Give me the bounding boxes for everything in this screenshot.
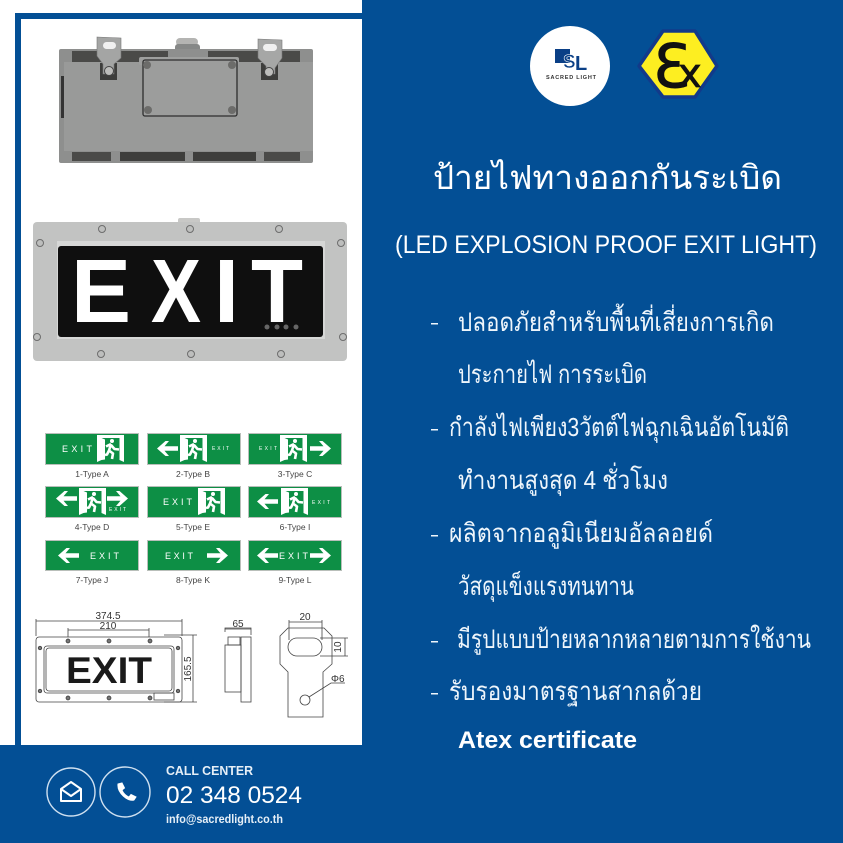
sign: type J: 7-Type J: [76, 575, 108, 585]
icon: phone: [100, 767, 150, 817]
bullet 2: ทำงานสูงสุด 4 ชั่วโมง: [458, 462, 668, 496]
sign: type E: [148, 486, 240, 532]
sign: type A: 1-Type A: [75, 469, 109, 479]
sign: type L: [248, 540, 342, 585]
icon: email: [47, 768, 95, 816]
bullet 3: [431, 518, 713, 602]
technical drawing: mounting bracket: 10: [333, 641, 344, 653]
EXIT lettering: I: [214, 242, 239, 342]
call center label: CALL CENTER: [166, 763, 254, 778]
product photo: front of fixture with EXIT sign: [33, 218, 347, 361]
sign: type L: 9-Type L: [278, 575, 312, 585]
phone number: 02 348 0524: [166, 782, 302, 809]
product photo: back of fixture: [59, 37, 313, 163]
sign: type D: EXIT: [109, 507, 126, 513]
technical drawing: side view: 65: [232, 619, 244, 630]
sign: type J: EXIT: [90, 551, 120, 561]
sign: type E: 5-Type E: [176, 522, 210, 532]
technical drawing: front view with dimensions: 210: [100, 621, 117, 632]
sign: type K: 8-Type K: [176, 575, 210, 585]
bullet 5: รับรองมาตรฐานสากลด้วย: [449, 676, 702, 707]
bullet 5: Atex certificate: [458, 727, 637, 754]
sign: type C: EXIT: [259, 446, 277, 452]
logo: Sacred Light: SACRED LIGHT: [546, 75, 597, 81]
technical drawing: front view with dimensions: 374.5: [95, 611, 121, 622]
logo: Sacred Light: L: [575, 53, 587, 75]
technical drawing: front view with dimensions: [36, 611, 197, 702]
technical drawing: front view with dimensions: 165.5: [183, 656, 194, 682]
sign: type K: EXIT: [165, 551, 194, 561]
sign: type C: [248, 434, 342, 479]
logo: Sacred Light: S: [563, 52, 576, 73]
footer: contact band: [47, 763, 302, 826]
bullet 1: [431, 303, 774, 389]
sign: type B: [148, 434, 240, 479]
sign: type I: 6-Type I: [280, 522, 310, 532]
sign: type A: [46, 434, 138, 479]
technical drawing: side view: [225, 619, 251, 702]
panel: product images: [0, 0, 362, 745]
sign: type L: EXIT: [279, 551, 308, 561]
logo: ATEX Ex hexagon: [639, 31, 717, 102]
logo: ATEX Ex hexagon: Ɛ: [653, 32, 690, 102]
subtitle: (LED EXPLOSION PROOF EXIT LIGHT): [395, 231, 817, 259]
bullet 3: วัสดุแข็งแรงทนทาน: [458, 570, 634, 602]
EXIT lettering: T: [251, 242, 303, 342]
sign: type I: EXIT: [312, 500, 330, 506]
sign: type J: [46, 540, 138, 585]
bullet 1: ประกายไฟ การระเบิด: [458, 359, 647, 389]
EXIT lettering: X: [151, 242, 201, 342]
sign: type E: EXIT: [163, 497, 192, 507]
sign: type I: [248, 486, 342, 532]
bullet 1: ปลอดภัยสำหรับพื้นที่เสี่ยงการเกิด: [458, 303, 774, 337]
technical drawing: mounting bracket: Φ6: [331, 674, 345, 685]
sign: type B: EXIT: [212, 446, 229, 452]
sign: type B: 2-Type B: [176, 469, 210, 479]
feature list: [431, 303, 811, 754]
technical drawing: mounting bracket: 20: [299, 612, 311, 623]
technical drawing: mounting bracket: [280, 612, 348, 717]
bullet 5: [431, 676, 702, 754]
bullet 2: [431, 412, 789, 496]
bullet 3: ผลิตจากอลูมิเนียมอัลลอยด์: [449, 518, 713, 549]
sign: type A: EXIT: [62, 444, 92, 454]
sign: type D: 4-Type D: [75, 522, 109, 532]
sign: type C: 3-Type C: [278, 469, 312, 479]
sign types grid: [46, 434, 342, 585]
sign: type K: [148, 540, 240, 585]
EXIT lettering: [71, 242, 303, 342]
logo: ATEX Ex hexagon: x: [678, 51, 702, 97]
EXIT lettering: E: [71, 242, 131, 342]
sign: type D: [46, 486, 138, 532]
email address: info@sacredlight.co.th: [166, 814, 283, 826]
logo: Sacred Light: [530, 26, 610, 106]
technical drawing: front view with dimensions: EXIT: [66, 650, 152, 691]
title: Thai heading: ป้ายไฟทางออกกันระเบิด: [433, 159, 782, 196]
